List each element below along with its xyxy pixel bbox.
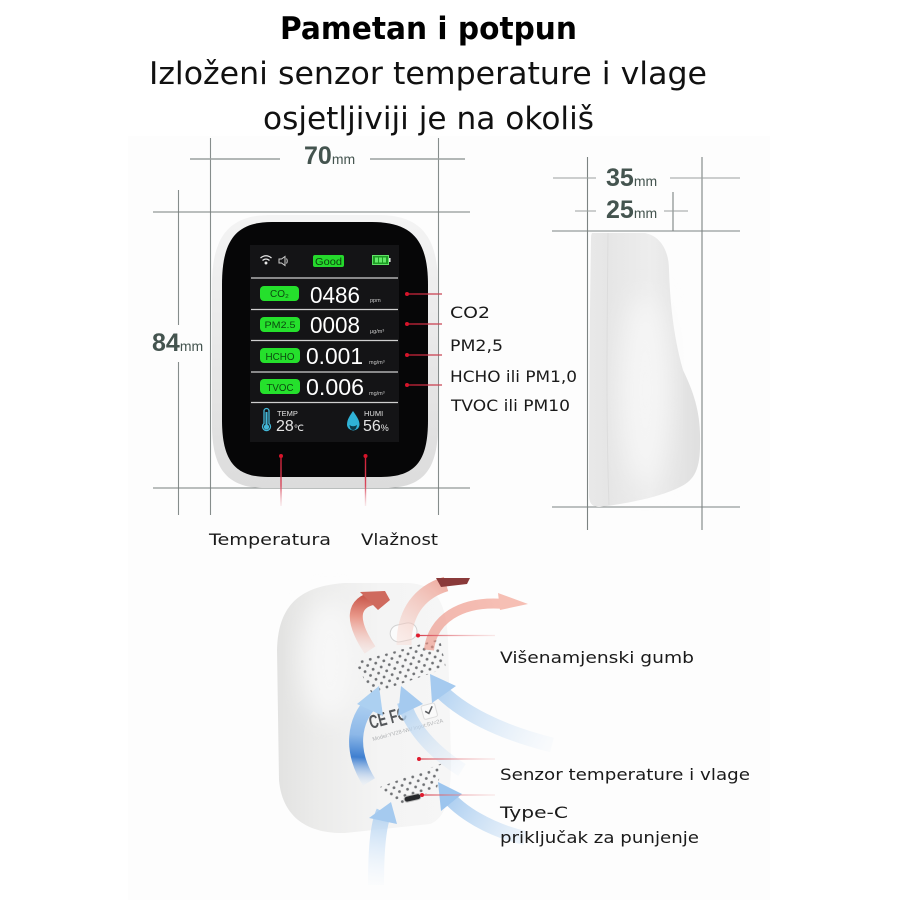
heading: Pametan i potpun: Pametan i potpun: [280, 11, 577, 47]
recycling badge: [421, 703, 438, 720]
arrow: cool air right: [430, 674, 552, 745]
badge: Good: Good: [315, 256, 342, 268]
lower vent grille: [380, 763, 443, 806]
subtitle line 1: Izloženi senzor temperature i vlage: [149, 56, 707, 92]
arrow: warm air left: [356, 591, 390, 650]
callout lines: temperature and humidity: [279, 454, 368, 506]
arrow: cool air left: [356, 686, 383, 782]
label: Type-C: Type-C: [499, 803, 568, 822]
title: [149, 11, 707, 137]
label: multifunction button: Višenamjenski gumb: [500, 648, 694, 667]
multifunction button: [389, 621, 419, 644]
model text: Model:YV28-NW Input:5V=2A: [372, 718, 444, 743]
icon: water drop: [347, 411, 360, 431]
row: HCHO: mg/m³: [369, 360, 385, 366]
row: TVOC: 0.006: [306, 374, 364, 400]
certification marks: CE FC: [367, 704, 409, 734]
label: HCHO ili PM1,0: HCHO ili PM1,0: [450, 367, 577, 386]
label: PM2,5: PM2,5: [450, 336, 503, 355]
device shell: [212, 215, 438, 488]
side seam: [607, 233, 609, 505]
row: PM2.5: [260, 312, 384, 338]
label: Vlažnost: Vlažnost: [361, 530, 438, 549]
upper vent grille: [355, 639, 446, 694]
temperature reading: 28℃: [276, 418, 304, 435]
subtitle line 2: osjetljiviji je na okoliš: [263, 101, 594, 137]
callout lines: sensor rows: [405, 292, 442, 387]
arrow: cool air bottom: [369, 802, 397, 885]
row: CO2: [260, 282, 381, 308]
side dimension lines: [552, 157, 740, 530]
row: HCHO: HCHO: [266, 352, 295, 363]
arrow: cool air centre: [398, 686, 462, 770]
icon: thermometer: [263, 409, 270, 431]
arrow: warm air centre: [404, 578, 470, 645]
temperature reading: TEMP: [277, 409, 298, 418]
label: 70 mm: 70mm: [304, 142, 355, 170]
device black face: [222, 222, 428, 477]
arrow: cool air lower right: [438, 782, 525, 838]
row: CO2: 0486: [310, 282, 360, 308]
row: TVOC: [260, 374, 385, 400]
back body: [277, 583, 451, 833]
label: 35 mm: 35mm: [606, 164, 657, 192]
front dimension lines: [153, 138, 470, 515]
USB-C port: [404, 793, 421, 803]
temperature reading: [276, 409, 304, 435]
row: TVOC: mg/m³: [369, 391, 385, 397]
label: TVOC ili PM10: TVOC ili PM10: [450, 396, 570, 415]
label: charging port: priključak za punjenje: [500, 828, 699, 847]
device: side view: [589, 233, 700, 507]
photo backdrop: [128, 136, 770, 900]
sensor labels: [208, 303, 577, 549]
screen panel: [250, 245, 399, 442]
callout lines: back view: [416, 634, 495, 797]
label: Temperatura: Temperatura: [208, 530, 331, 549]
row: HCHO: 0.001: [306, 343, 363, 369]
label: 25 mm: 25mm: [606, 196, 657, 224]
row: TVOC: TVOC: [266, 383, 294, 394]
back view labels: [499, 648, 750, 847]
row: PM2.5: 0008: [310, 312, 360, 338]
label: CO2: CO2: [450, 303, 490, 322]
side body: [589, 233, 700, 507]
row: CO2: CO₂: [270, 289, 289, 300]
humidity reading: [363, 409, 389, 435]
side highlight: [621, 295, 669, 485]
label: 84 mm: 84mm: [152, 329, 203, 357]
icon: speaker: [279, 256, 287, 266]
row: HCHO: [260, 343, 385, 369]
row: PM2.5: μg/m³: [370, 329, 384, 335]
icon: battery: [372, 256, 391, 264]
arrow: warm air right: [429, 593, 528, 650]
body highlight: [302, 600, 358, 720]
row: PM2.5: PM2.5: [264, 320, 296, 331]
device: front view: [212, 215, 438, 488]
icon: wifi: [260, 256, 272, 264]
humidity reading: HUMI: [364, 409, 383, 418]
screen: [250, 245, 399, 442]
label: sensor: Senzor temperature i vlage: [500, 765, 750, 784]
row: CO2: ppm: [370, 298, 381, 304]
device: back view with airflow: [277, 578, 552, 885]
humidity reading: 56%: [363, 418, 389, 435]
screen dividers: [251, 278, 398, 402]
